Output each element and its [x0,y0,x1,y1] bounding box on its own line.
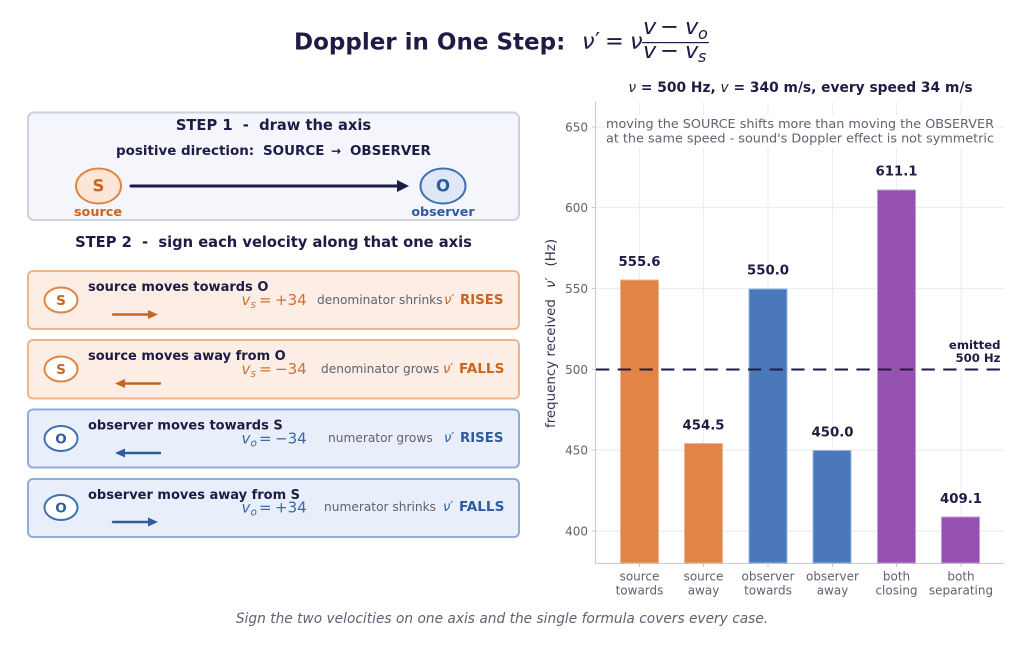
category labels: towards [616,584,663,598]
panel: observer away: = [259,498,272,516]
title: = [605,28,624,54]
emitted label: 500 Hz [955,351,1001,365]
positive direction text: → [331,144,341,158]
step 1 heading: STEP 1 - draw the axis [176,117,371,134]
panel: source away: = [259,360,272,378]
title: v [643,38,657,64]
panel: source towards: ν′ [444,293,454,308]
panel: source towards: = [259,291,272,309]
icon: observer circle [420,168,466,204]
y tick labels: 600 [565,201,588,215]
emitted reference line [596,368,1004,370]
panel: observer away: +34 [275,498,307,516]
panel: observer away [28,479,519,537]
category labels: separating [929,584,993,598]
category labels: towards [744,584,792,598]
axes [592,102,1004,567]
panel: observer away: o [250,506,257,518]
positive direction text: OBSERVER [350,144,431,159]
panel: source away: ν′ [443,362,453,377]
panel: source towards: denominator shrinks [317,293,443,307]
bars [620,190,980,563]
panel: observer away: FALLS [459,499,504,515]
y axis title: frequency received [544,299,559,428]
icon: source circle [76,168,121,204]
panel: observer towards: observer moves towards S [88,418,283,434]
category labels: source [620,570,659,584]
title: − [660,14,679,40]
bar value labels: 450.0 [811,426,854,440]
footer caption: Sign the two velocities on one axis and the single formula covers every case. [236,611,768,627]
title: ν [630,28,643,54]
positive direction text [116,144,431,159]
category labels: away [688,584,719,598]
category labels: closing [875,584,918,598]
title: ′ [595,28,600,54]
positive direction text: positive direction: [116,144,254,159]
title: v [643,14,657,40]
y tick labels: 500 [565,363,588,377]
bar value labels: 454.5 [682,418,725,434]
positive direction text: SOURCE [263,144,324,159]
category labels: observer [806,570,859,584]
category labels: source [684,570,723,584]
title: ν [582,28,595,54]
panel: source towards: v [242,291,252,309]
note: at the same speed - sound's Doppler effect is not symmetric [606,132,994,146]
panel: observer towards [28,410,519,468]
y axis title: ν′ [544,277,559,288]
title: v [685,14,699,40]
emitted label [949,338,1001,365]
source label: source [74,205,122,220]
panel: observer towards: v [242,430,252,448]
panel: source away: −34 [275,360,307,378]
panel: observer away: numerator shrinks [324,500,436,514]
bar value labels: 550.0 [747,264,789,278]
y tick labels: 650 [565,120,588,134]
category labels: both [883,570,910,584]
emitted label: emitted [949,338,1000,352]
panel: source towards: source moves towards O [88,280,268,295]
note [604,115,996,148]
panel: observer towards: O [55,432,67,448]
panel: observer away: O [55,500,67,516]
panel: source away: denominator grows [321,362,439,376]
bar value labels: 611.1 [875,164,918,180]
panel: source towards: +34 [275,291,307,309]
title: Doppler in One Step: [294,30,565,56]
panel: observer towards: ν′ [444,431,454,446]
bar chart [544,102,1004,598]
bar value labels [618,164,982,507]
panel: source towards: s [250,299,256,311]
y tick labels: 400 [565,524,588,538]
note: moving the SOURCE shifts more than moving the OBSERVER [606,117,994,132]
step 2 heading: STEP 2 - sign each velocity along that one axis [75,234,472,251]
chart subtitle: ν = 500 Hz, v = 340 m/s, every speed 34 m/s [628,80,973,96]
panel: source towards: RISES [460,293,503,308]
panel: observer towards: −34 [275,430,307,448]
panel: observer away: observer moves away from S [88,488,300,503]
panel: source towards: S [56,293,66,309]
icon: observer circle: O [436,176,450,196]
category labels: away [817,584,848,598]
y tick labels [565,120,588,538]
y axis title: (Hz) [544,239,559,266]
title: o [698,24,708,43]
panel: observer towards: o [250,438,257,450]
bar value labels: 555.6 [618,255,661,270]
panel: observer away: v [242,498,252,516]
panel: source away: s [250,368,256,380]
title: − [660,38,679,64]
panel: source away [28,340,519,398]
title: s [698,47,706,66]
y tick labels: 550 [565,282,588,296]
panel: observer towards: numerator grows [328,431,433,445]
panel: observer away: ν′ [443,500,453,515]
bar value labels: 409.1 [940,492,982,507]
panel: step 1 axis [28,112,519,220]
category labels: observer [742,570,795,584]
y tick labels: 450 [565,444,588,458]
category labels [616,570,993,598]
icon: source circle: S [93,176,104,196]
panel: source away: v [242,360,252,378]
panel: source away: FALLS [459,361,504,377]
axis arrow [131,180,409,192]
panel: source away: source moves away from O [88,349,286,364]
panel: source towards [28,271,519,329]
panel: observer towards: RISES [460,431,503,446]
title: v [685,38,699,64]
observer label: observer [411,204,475,219]
category labels: both [947,570,975,584]
y axis title [544,239,559,428]
panel: source away: S [56,362,66,378]
panel: observer towards: = [259,430,272,448]
title [294,14,709,66]
